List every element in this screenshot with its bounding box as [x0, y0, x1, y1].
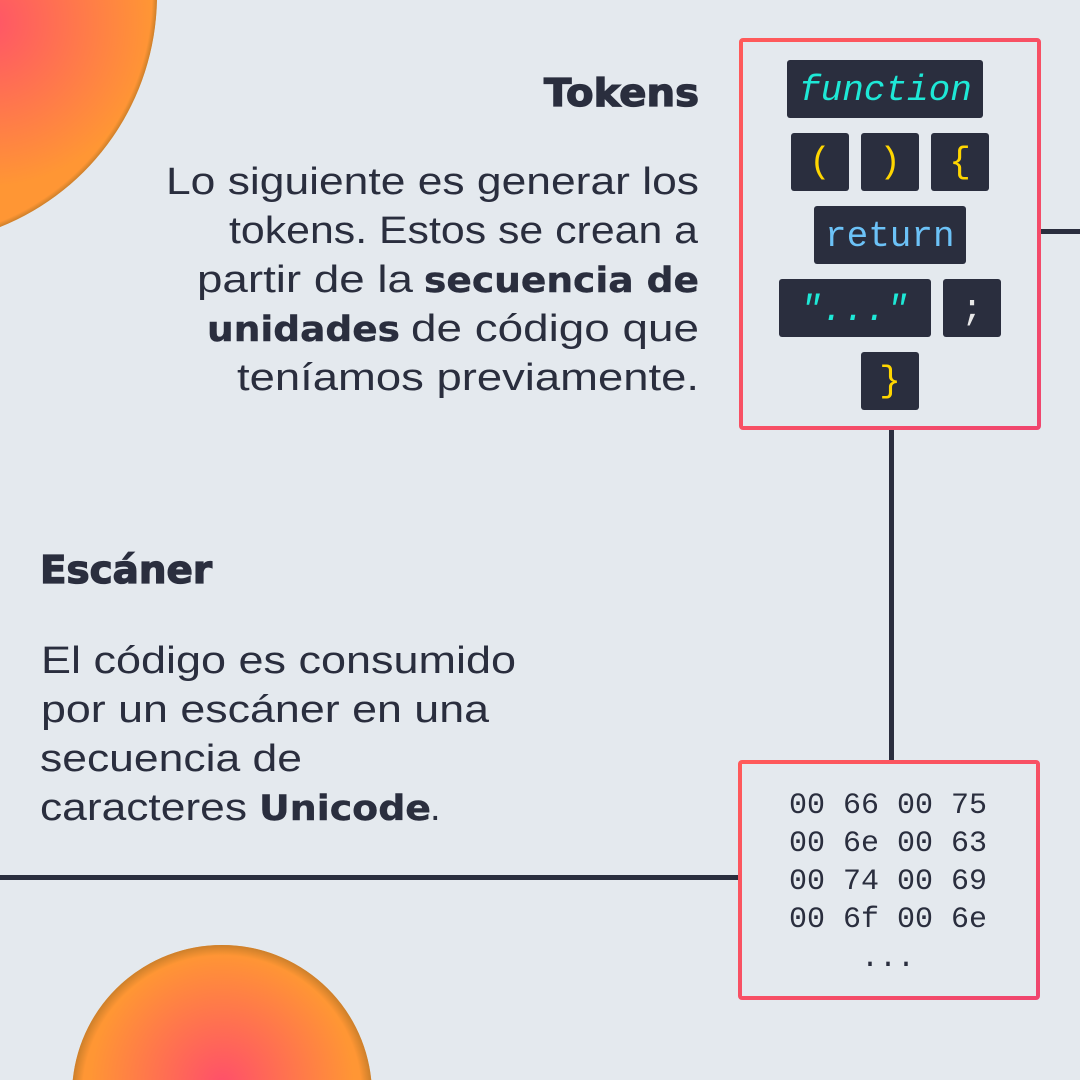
token: semicolon: ;	[961, 289, 983, 330]
token: function	[787, 60, 983, 118]
hex code lines: 00 74 00 69	[789, 865, 987, 899]
hex code lines: 00 6e 00 63	[789, 827, 987, 861]
token: return	[814, 206, 966, 264]
token: close paren: )	[879, 142, 901, 183]
heading: Escáner: Escáner	[40, 548, 212, 592]
text block: tokens description: Lo siguiente es generar los	[166, 161, 699, 203]
hex code lines: ...	[861, 942, 915, 976]
token: open paren	[791, 133, 849, 191]
token: close paren	[861, 133, 919, 191]
connector: left edge to scanner box	[0, 875, 740, 880]
text block: tokens description: secuencia de	[424, 261, 699, 301]
text block: scanner description: El código es consumido	[41, 640, 516, 682]
decorative circle: top left	[0, 0, 157, 227]
hex code lines: 00 66 00 75	[789, 789, 987, 823]
token: semicolon	[943, 279, 1001, 337]
token: return: return	[825, 216, 955, 257]
token: open paren: (	[809, 142, 831, 183]
text block: tokens description: partir de la	[197, 259, 414, 301]
connector: vertical between boxes	[889, 428, 894, 762]
connector: token box to right edge	[1040, 229, 1080, 234]
token: string: "..."	[800, 290, 908, 331]
text block: scanner description: Unicode	[259, 789, 431, 829]
text block: tokens description: tokens. Estos se crean a	[229, 210, 699, 252]
text block: tokens description	[166, 161, 699, 399]
hex code lines	[789, 789, 987, 976]
text block: scanner description	[40, 640, 516, 829]
token: string	[779, 279, 931, 337]
text block: tokens description: unidades	[207, 310, 400, 350]
text block: scanner description: por un escáner en una	[41, 689, 490, 731]
token: open brace	[931, 133, 989, 191]
text block: scanner description: secuencia de	[40, 738, 302, 780]
hex code lines: 00 6f 00 6e	[789, 903, 987, 937]
text block: tokens description: de código que	[411, 308, 699, 350]
token: open brace: {	[949, 142, 971, 183]
text block: scanner description: .	[430, 787, 441, 829]
panel: tokens box	[741, 40, 1039, 428]
text block: tokens description: teníamos previamente.	[237, 357, 699, 399]
token: close brace: }	[879, 361, 901, 402]
token: close brace	[861, 352, 919, 410]
text block: scanner description: caracteres	[40, 787, 247, 829]
panel: scanner hex box	[740, 762, 1038, 998]
heading: Tokens: Tokens	[544, 71, 699, 115]
decorative circle: bottom	[73, 945, 371, 1080]
token: function: function	[799, 70, 972, 111]
